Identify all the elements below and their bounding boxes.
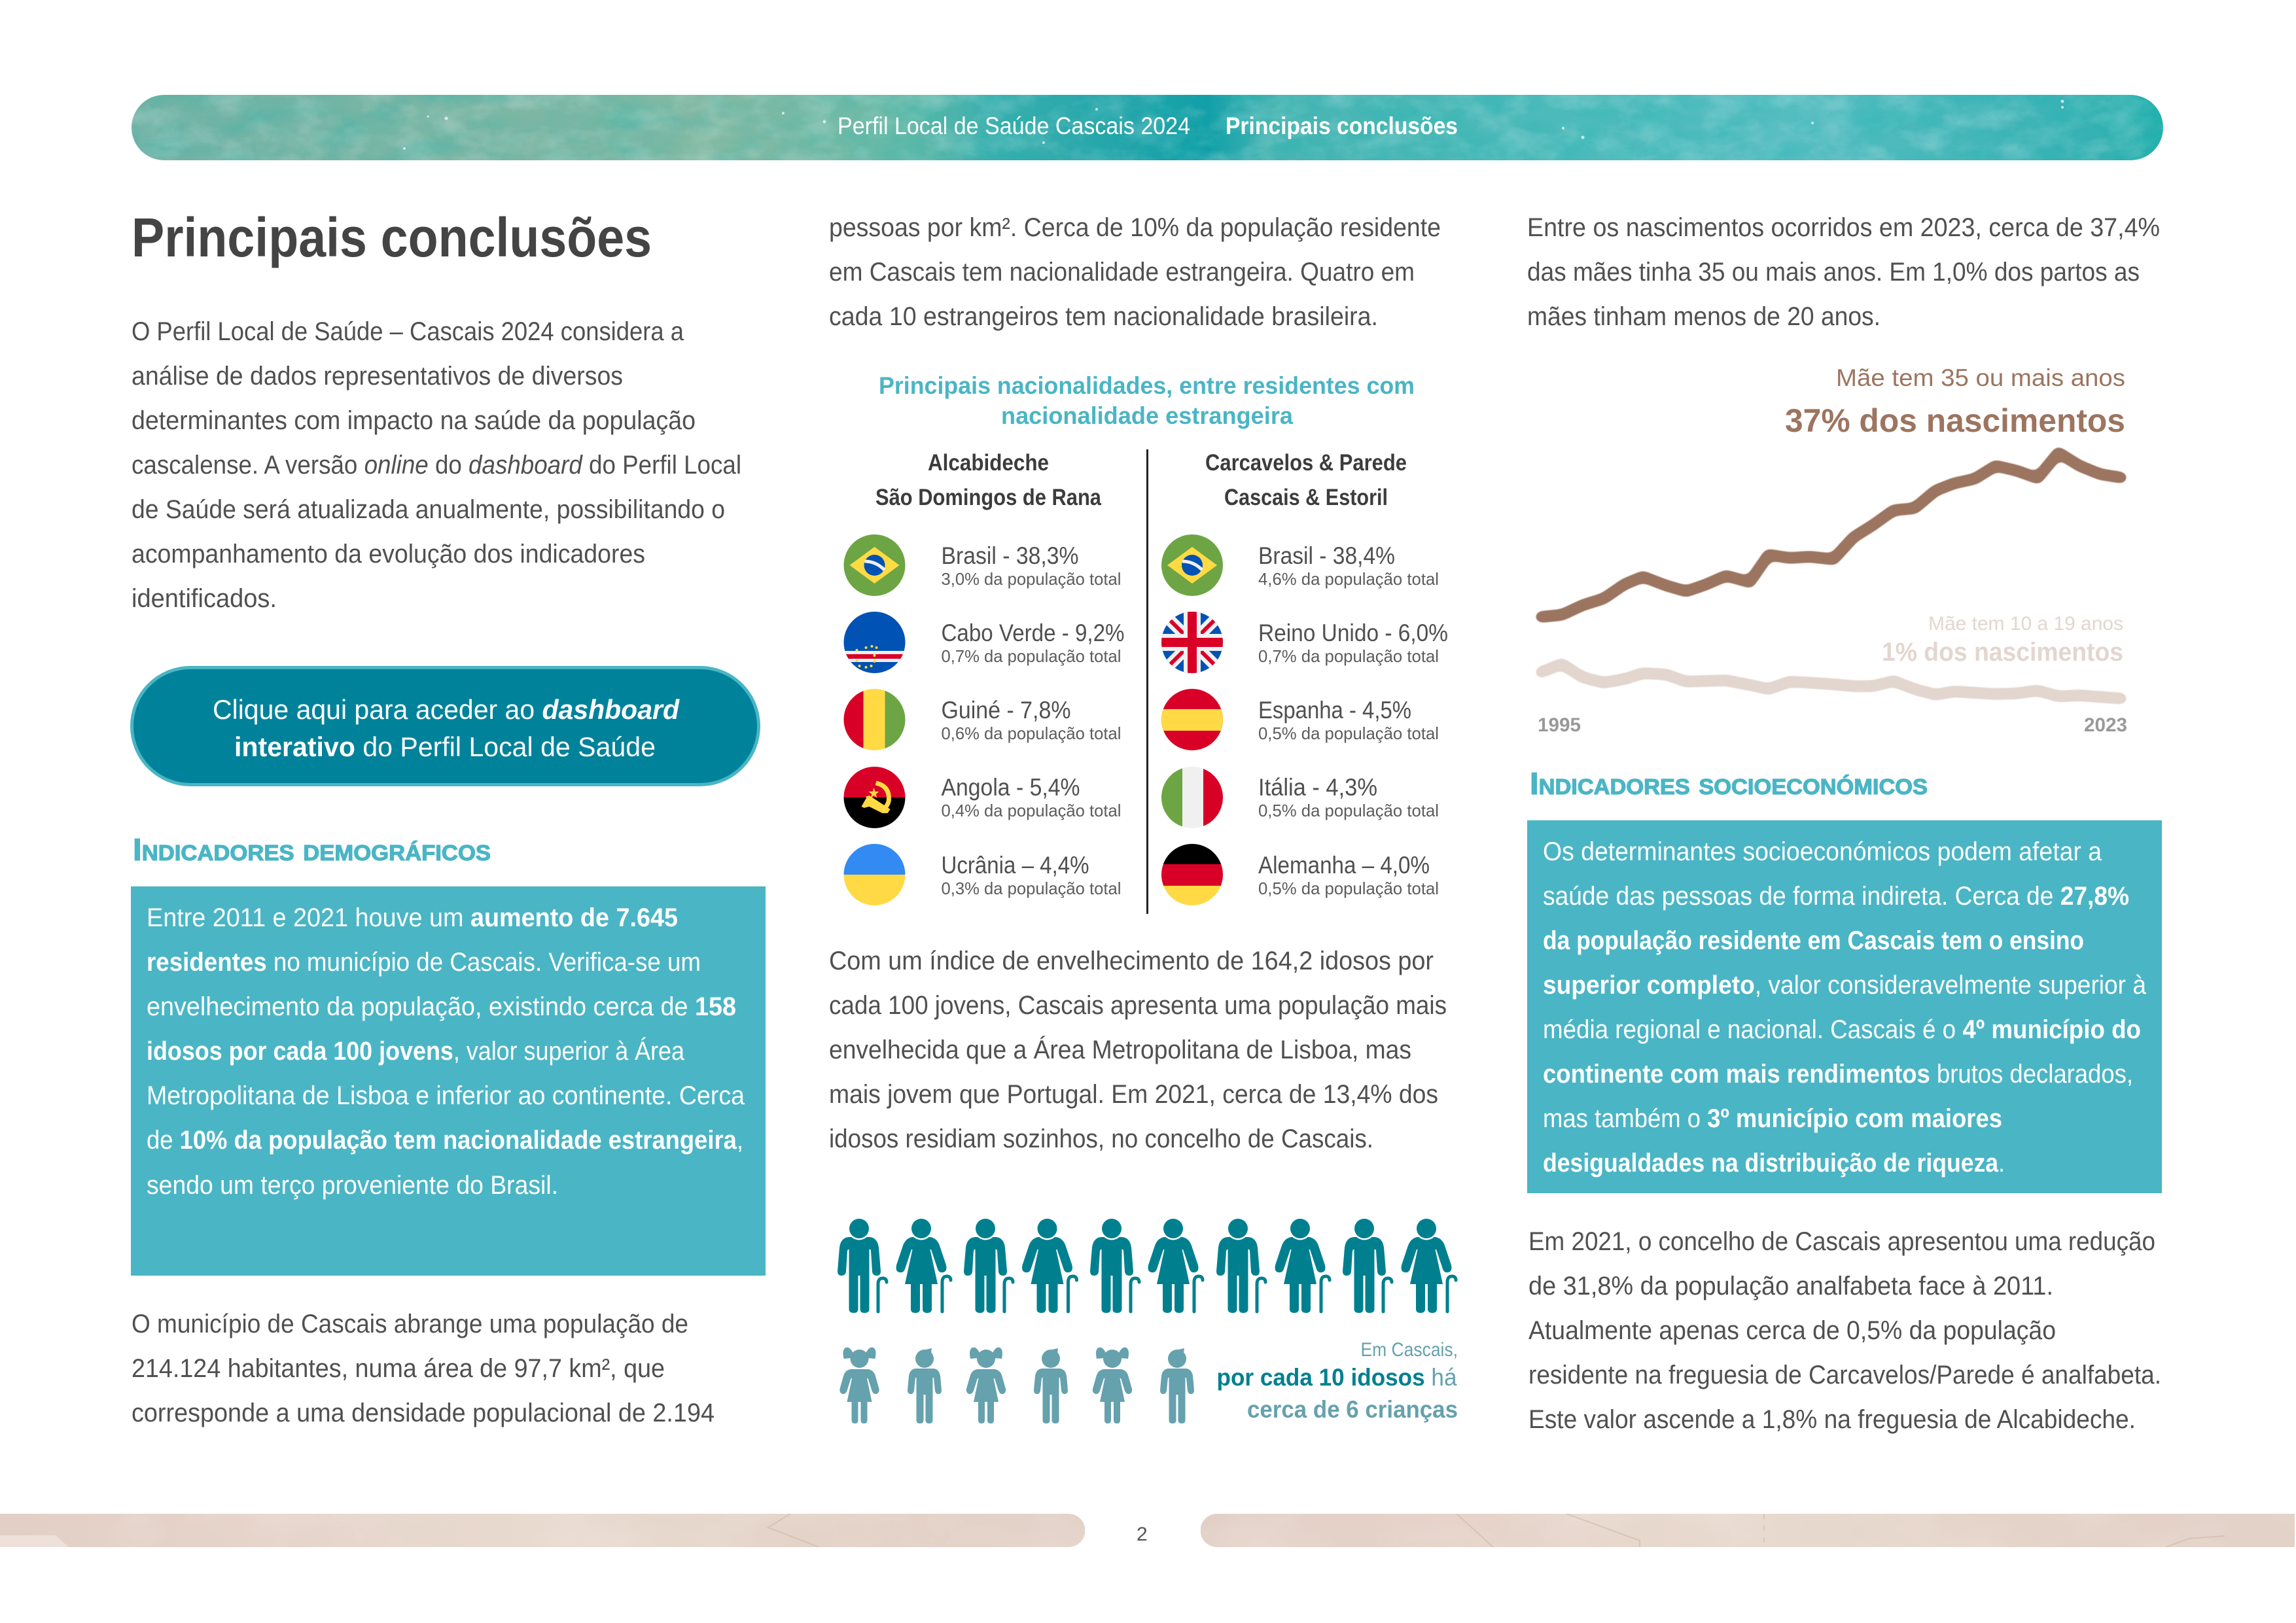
row: Alemanha: 0,5% da população total [1258, 879, 1439, 898]
text block: illiteracy: Atualmente apenas cerca de 0,5% da população [1528, 1316, 2056, 1345]
text block: births: das mães tinha 35 ou mais anos. Em 1,0% dos partos as [1527, 258, 2140, 287]
text block: density continued: em Cascais tem nacionalidade estrangeira. Quatro em [829, 258, 1415, 287]
text block: ageing: cada 100 jovens, Cascais apresenta uma população mais [829, 991, 1447, 1020]
row: Itália [1161, 767, 1439, 828]
panel: socioeconomic indicators: saúde das pessoas de forma indireta. Cerca de 27,8% [1543, 882, 2129, 911]
nationalities left column heading: São Domingos de Rana [875, 485, 1101, 510]
nationalities right column heading: Cascais & Estoril [1224, 485, 1388, 510]
panel: demographic indicators: sendo um terço proveniente do Brasil. [147, 1171, 558, 1200]
row: Reino Unido: 0,7% da população total [1258, 646, 1439, 666]
text block: births [1527, 213, 2160, 331]
heading: demographic indicators: Indicadores demográficos [133, 832, 491, 867]
text block: ageing: idosos residiam sozinhos, no concelho de Cascais. [829, 1125, 1373, 1153]
label: 10 to 19: Mãe tem 10 a 19 anos [1928, 613, 2123, 635]
nationalities right column heading [1205, 450, 1407, 510]
text block: population: O município de Cascais abrange uma população de [132, 1310, 688, 1338]
row: Ucrânia: 0,3% da população total [941, 879, 1122, 898]
text block: illiteracy: residente na freguesia de Carcavelos/Parede é analfabeta. [1528, 1361, 2161, 1389]
row: Cabo Verde: Cabo Verde - 9,2% [941, 620, 1124, 646]
text block: density continued: pessoas por km². Cerca de 10% da população residente [829, 213, 1441, 242]
icon row: 6 children [839, 1348, 1194, 1423]
text block: illiteracy: Este valor ascende a 1,8% na freguesia de Alcabideche. [1528, 1405, 2136, 1434]
row: Brasil right: Brasil - 38,4% [1258, 542, 1395, 569]
footer band right [1201, 1514, 2295, 1547]
text block: population: 214.124 habitantes, numa área de 97,7 km², que [132, 1354, 665, 1383]
panel: demographic indicators: residentes no município de Cascais. Verifica-se um [147, 948, 701, 977]
intro text block: O Perfil Local de Saúde – Cascais 2024 considera a [132, 317, 684, 346]
row: Guiné: Guiné - 7,8% [941, 697, 1070, 724]
header banner: Principais conclusões [1226, 113, 1458, 139]
intro text block: de Saúde será atualizada anualmente, possibilitando o [132, 495, 725, 524]
panel: socioeconomic indicators: mas também o 3º município com maiores [1543, 1104, 2002, 1133]
text block: ageing [829, 947, 1447, 1153]
chart title: nationalities [879, 372, 1415, 429]
callout: elderly vs children: por cada 10 idosos há [1217, 1364, 1457, 1391]
intro text block: acompanhamento da evolução dos indicadores [132, 540, 645, 568]
text block: population [132, 1310, 715, 1427]
button: dashboard link: interativo do Perfil Local de Saúde [234, 731, 656, 762]
row: Itália: 0,5% da população total [1258, 801, 1439, 820]
icon row: 10 elderly people [838, 1217, 1456, 1313]
panel: socioeconomic indicators: Os determinantes socioeconómicos podem afetar a [1543, 837, 2102, 866]
series: 35 or older [1541, 453, 2121, 617]
row: Angola: Angola - 5,4% [941, 774, 1080, 801]
panel: demographic indicators: Metropolitana de Lisboa e inferior ao continente. Cerca [147, 1081, 745, 1110]
row: Brasil right [1161, 534, 1439, 596]
panel: demographic indicators: Entre 2011 e 2021 houve um aumento de 7.645 [147, 903, 678, 932]
row: Brasil left [844, 534, 1122, 596]
heading: socioeconomic indicators: Indicadores socioeconómicos [1530, 766, 1928, 801]
nationalities left column heading: Alcabideche [928, 450, 1049, 476]
row: Cabo Verde: 0,7% da população total [941, 646, 1122, 666]
page number: 2 [1137, 1524, 1148, 1545]
row: Alemanha [1161, 844, 1439, 905]
row: Espanha: Espanha - 4,5% [1258, 697, 1411, 724]
row: Espanha: 0,5% da população total [1258, 724, 1439, 743]
panel: socioeconomic indicators: superior completo, valor consideravelmente superior à [1543, 971, 2147, 1000]
row: Ucrânia: Ucrânia – 4,4% [941, 852, 1089, 879]
panel: socioeconomic indicators: média regional e nacional. Cascais é o 4º município do [1543, 1015, 2141, 1044]
axis start: 1995 [1538, 714, 1581, 736]
label: 35 or older: Mãe tem 35 ou mais anos [1836, 364, 2125, 391]
row: Guiné [844, 689, 1122, 750]
nationalities right column heading: Carcavelos & Parede [1205, 450, 1407, 476]
row: Angola: 0,4% da população total [941, 801, 1122, 820]
chart title: nationalities: nacionalidade estrangeira [1001, 402, 1293, 429]
text block: ageing: envelhecida que a Área Metropolitana de Lisboa, mas [829, 1035, 1411, 1064]
title: Principais conclusões [132, 207, 652, 268]
header banner [132, 95, 2163, 160]
value: 1%: 1% dos nascimentos [1882, 638, 2123, 667]
text block: density continued: cada 10 estrangeiros tem nacionalidade brasileira. [829, 302, 1378, 331]
row: Alemanha: Alemanha – 4,0% [1258, 852, 1430, 879]
axis end: 2023 [2084, 714, 2127, 736]
row: Angola [844, 767, 1122, 828]
row: Brasil right: 4,6% da população total [1258, 569, 1439, 589]
text block: population: corresponde a uma densidade populacional de 2.194 [132, 1399, 715, 1427]
text block: illiteracy: Em 2021, o concelho de Cascais apresentou uma redução [1528, 1227, 2155, 1256]
panel: demographic indicators [131, 886, 766, 1276]
row: Reino Unido [1161, 612, 1448, 673]
nationalities left column heading [875, 450, 1101, 510]
row: Guiné: 0,6% da população total [941, 724, 1122, 743]
chart title: nationalities: Principais nacionalidades, entre residentes com [879, 372, 1415, 399]
text block: illiteracy: de 31,8% da população analfabeta face à 2011. [1528, 1272, 2053, 1300]
intro text block: determinantes com impacto na saúde da população [132, 406, 696, 435]
row: Ucrânia [844, 844, 1122, 905]
intro text block [132, 317, 741, 613]
row: Itália: Itália - 4,3% [1258, 774, 1377, 801]
panel: socioeconomic indicators: da população residente em Cascais tem o ensino [1543, 926, 2084, 955]
row: Cabo Verde [844, 612, 1124, 673]
text block: density continued [829, 213, 1441, 331]
text block: ageing: Com um índice de envelhecimento de 164,2 idosos por [829, 947, 1434, 975]
button: dashboard link [132, 667, 759, 785]
button: dashboard link: Clique aqui para aceder ao dashboard [213, 694, 680, 725]
panel: socioeconomic indicators: continente com mais rendimentos brutos declarados, [1543, 1060, 2133, 1089]
header banner: Perfil Local de Saúde Cascais 2024 [838, 113, 1190, 139]
text block: births: Entre os nascimentos ocorridos em 2023, cerca de 37,4% [1527, 213, 2160, 242]
panel: socioeconomic indicators: desigualdades na distribuição de riqueza. [1543, 1149, 2005, 1178]
intro text block: análise de dados representativos de diversos [132, 362, 623, 391]
row: Espanha [1161, 689, 1439, 750]
intro text block: identificados. [132, 584, 277, 613]
panel: socioeconomic indicators [1527, 820, 2162, 1193]
panel: demographic indicators: envelhecimento da população, existindo cerca de 158 [147, 992, 736, 1021]
intro text block: cascalense. A versão online do dashboard do Perfil Local [132, 451, 741, 480]
text block: illiteracy [1528, 1227, 2161, 1434]
panel: demographic indicators: idosos por cada 100 jovens, valor superior à Área [147, 1036, 685, 1066]
text block: births: mães tinham menos de 20 anos. [1527, 302, 1881, 331]
callout: elderly vs children: cerca de 6 crianças [1247, 1396, 1458, 1423]
value: 37%: 37% dos nascimentos [1785, 402, 2125, 439]
row: Reino Unido: Reino Unido - 6,0% [1258, 620, 1448, 646]
text block: ageing: mais jovem que Portugal. Em 2021, cerca de 13,4% dos [829, 1080, 1438, 1109]
callout: elderly vs children: Em Cascais, [1361, 1339, 1458, 1361]
row: Brasil left: Brasil - 38,3% [941, 542, 1078, 569]
line chart: births by mother age [1538, 364, 2127, 736]
row: Brasil left: 3,0% da população total [941, 569, 1122, 589]
panel: demographic indicators: de 10% da população tem nacionalidade estrangeira, [147, 1126, 743, 1155]
callout: elderly vs children [1217, 1339, 1458, 1423]
footer band left [0, 1514, 1085, 1547]
series: 10 to 19 [1541, 664, 2121, 699]
